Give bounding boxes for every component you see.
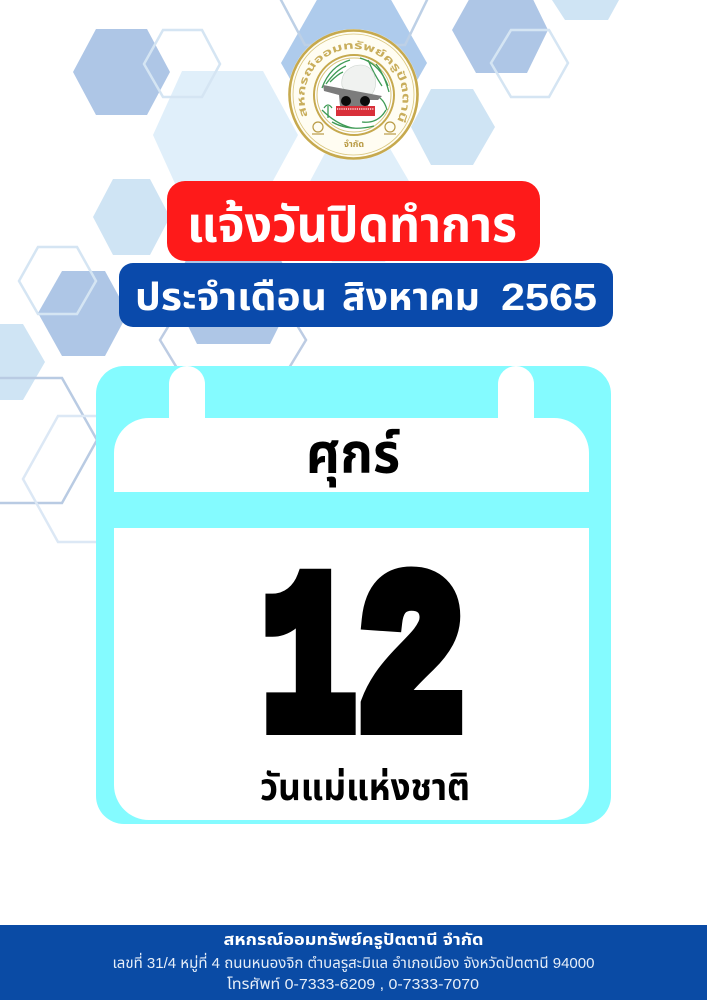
weekday text: ศุกร์ [306,422,400,488]
seal suffix text: จำกัด [344,139,364,149]
background hexagon pattern [0,0,619,542]
date number: 1 [262,540,355,792]
logo: cooperative seal [288,29,419,160]
date number: 2 [358,542,465,792]
title text: แจ้งวันปิดทำการ [187,197,517,253]
calendar card [96,366,611,824]
footer band [0,925,707,1000]
date number [262,540,465,792]
holiday name text: วันแม่แห่งชาติ [260,767,470,808]
subtitle text: 2565 [501,277,597,319]
phone numbers: โทรศัพท์ 0-7333-6209 , 0-7333-7070 [227,976,479,993]
calendar header panel [114,418,589,492]
subtitle text: สิงหาคม [342,277,480,319]
seal emblem: foliage [322,58,389,128]
address: เลขที่ 31/4 หมู่ที่ 4 ถนนหนองจิก ตำบลรูสะมิแล อำเภอเมือง จังหวัดปัตตานี 94000 [112,952,594,972]
seal emblem: mountain [342,65,376,94]
seal emblem: cannon [323,85,382,106]
subtitle text: ประจำเดือน [135,277,327,319]
seal emblem: red base [336,106,375,116]
calendar binding tab left [169,366,205,420]
blue subtitle banner [119,263,613,327]
calendar body panel [114,528,589,820]
seal name text: สหกรณ์ออมทรัพย์ครูปัตตานี [298,40,408,123]
organisation name: สหกรณ์ออมทรัพย์ครูปัตตานี จำกัด [224,932,484,950]
red title banner [167,181,540,261]
seal emblem: side ornaments [312,122,396,134]
subtitle text [135,277,597,319]
calendar binding tab right [498,366,534,420]
